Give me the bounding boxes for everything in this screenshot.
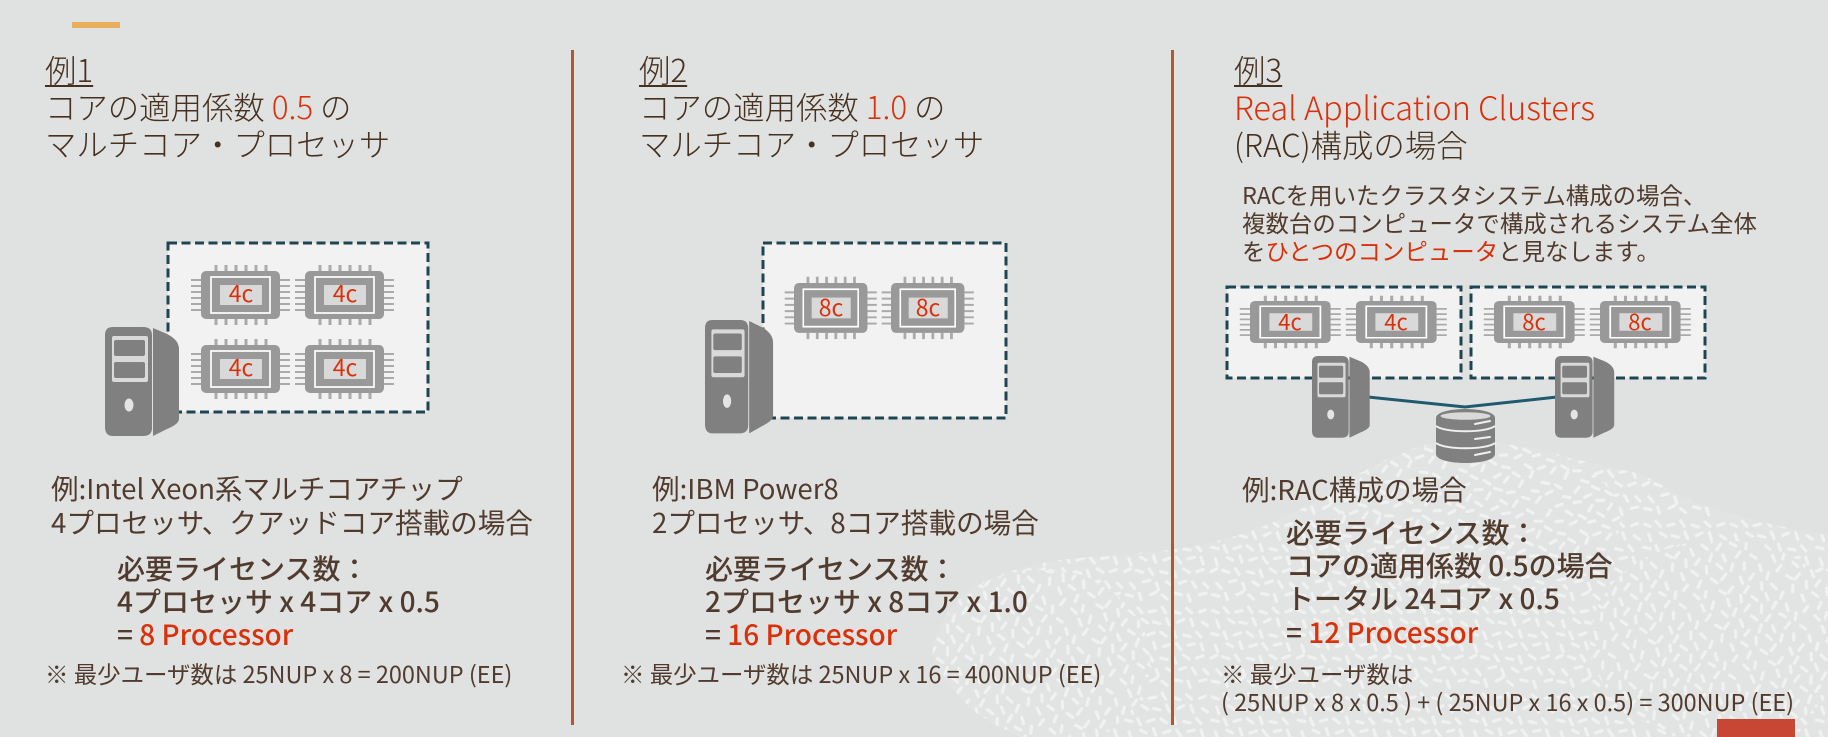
license formula 3 (1286, 512, 1613, 652)
accent bar (72, 22, 120, 28)
dashed system box B (1471, 287, 1705, 378)
chip 3 (191, 339, 290, 399)
panel 1: example 1 (45, 47, 533, 690)
heading 2: マルチコア・プロセッサ (639, 121, 984, 166)
database icon (1436, 409, 1495, 463)
cluster connection lines (1368, 397, 1557, 407)
note 3: ※ 最少ユーザ数は (1221, 656, 1413, 690)
server tower 2 (705, 320, 773, 433)
note 3 (1221, 656, 1794, 718)
chip 1 (785, 277, 877, 339)
chip B2: 8c (1628, 305, 1652, 337)
description 1: 4プロセッサ、クアッドコア搭載の場合 (51, 500, 533, 540)
description 2: 例:IBM Power8 (652, 467, 839, 507)
heading 3 (1234, 47, 1595, 167)
chip B1: 8c (1522, 305, 1546, 337)
heading 1: コアの適用係数 0.5 の (45, 84, 351, 129)
heading 3: Real Application Clusters (1234, 83, 1595, 130)
description 3: 例:RAC構成の場合 (1242, 468, 1467, 508)
dashed system box A (1227, 287, 1461, 378)
heading 2 (639, 47, 984, 166)
server tower A (1312, 356, 1370, 438)
chip 4 (295, 339, 394, 399)
heading 2: 例2 (639, 47, 687, 92)
chip 1: 8c (819, 289, 844, 323)
divider 2 (1171, 50, 1174, 725)
license formula 1: 必要ライセンス数： (117, 548, 368, 588)
heading 1 (45, 47, 390, 166)
chip 2: 8c (916, 289, 941, 323)
heading 1: 例1 (45, 47, 93, 92)
RAC explanation (1242, 177, 1757, 267)
chip 2: 4c (333, 275, 358, 309)
description 1 (51, 467, 533, 540)
note 1: ※ 最少ユーザ数は 25NUP x 8 = 200NUP (EE) (45, 656, 512, 690)
RAC explanation: RACを用いたクラスタシステム構成の場合、 (1242, 177, 1706, 211)
note 3: ( 25NUP x 8 x 0.5 ) + ( 25NUP x 16 x 0.5) = 300NUP (EE) (1221, 684, 1794, 718)
chip 2 (882, 277, 974, 339)
chip 1: 4c (229, 275, 254, 309)
server tower B (1555, 356, 1614, 438)
description 2: 2プロセッサ、8コア搭載の場合 (652, 500, 1039, 540)
diagram: example 2 server with two 8-core chips (705, 243, 1006, 433)
diagram: example 1 server with four 4-core chips (105, 243, 428, 436)
chip B2 (1590, 296, 1691, 348)
license formula 2: 必要ライセンス数： (705, 548, 956, 588)
chip 4: 4c (333, 349, 358, 383)
RAC explanation: 複数台のコンピュータで構成されるシステム全体 (1242, 205, 1757, 239)
license formula 1 (117, 548, 440, 654)
background decorative pattern (900, 430, 1828, 737)
dashed system box 1 (168, 243, 428, 412)
description 2 (652, 467, 1039, 540)
chip 2 (295, 265, 394, 325)
note 2: ※ 最少ユーザ数は 25NUP x 16 = 400NUP (EE) (621, 656, 1101, 690)
heading 3: 例3 (1234, 47, 1282, 92)
chip A1 (1240, 296, 1341, 348)
license formula 2 (705, 548, 1028, 654)
license formula 2: = 16 Processor (705, 614, 897, 654)
RAC explanation: をひとつのコンピュータと見なします。 (1242, 233, 1660, 267)
panel 3: example 3 (1221, 47, 1794, 718)
diagram: example 3 RAC cluster (1227, 287, 1705, 463)
chip A2: 4c (1384, 305, 1408, 337)
heading 2: コアの適用係数 1.0 の (639, 84, 945, 129)
description 1: 例:Intel Xeon系マルチコアチップ (51, 467, 463, 507)
license formula 3: 必要ライセンス数： (1286, 512, 1537, 552)
server tower 1 (105, 327, 179, 436)
license formula 1: = 8 Processor (117, 614, 293, 654)
heading 1: マルチコア・プロセッサ (45, 121, 390, 166)
chip B1 (1484, 296, 1585, 348)
license formula 1: 4プロセッサ x 4コア x 0.5 (117, 581, 440, 621)
panel 2: example 2 (621, 47, 1101, 690)
chip 3: 4c (229, 349, 254, 383)
license formula 3: = 12 Processor (1286, 612, 1478, 652)
license formula 2: 2プロセッサ x 8コア x 1.0 (705, 581, 1028, 621)
chip A2 (1346, 296, 1447, 348)
corner block (1717, 719, 1795, 737)
license formula 3: トータル 24コア x 0.5 (1286, 578, 1560, 618)
chip 1 (191, 265, 290, 325)
heading 3: (RAC)構成の場合 (1234, 122, 1468, 167)
license formula 3: コアの適用係数 0.5の場合 (1286, 545, 1613, 585)
dashed system box 2 (763, 243, 1006, 418)
chip A1: 4c (1278, 305, 1302, 337)
divider 1 (571, 50, 574, 725)
